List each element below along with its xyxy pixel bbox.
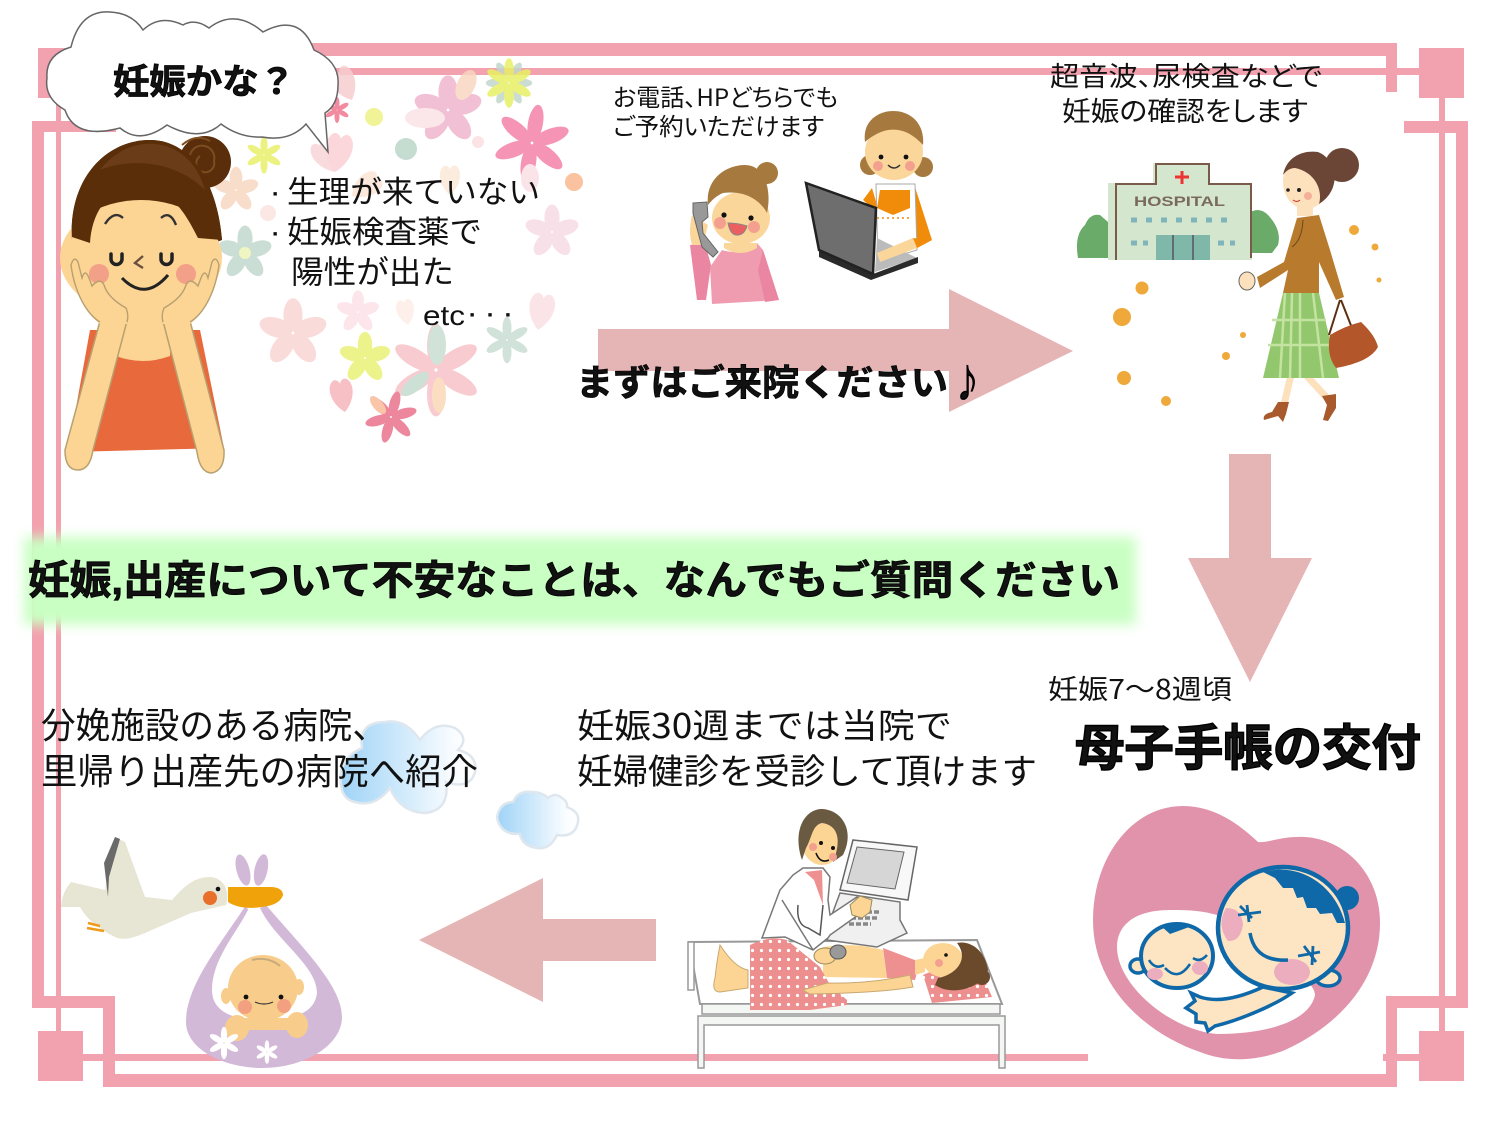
text: ultrasound note [1050, 55, 1322, 129]
illustration: walking woman [1239, 148, 1378, 422]
symptoms list: 妊娠検査薬で [287, 215, 482, 250]
symptoms list: ■ [273, 231, 277, 238]
symptoms list [273, 175, 540, 331]
text: referral to delivery hospital: 里帰り出産先の病院へ紹介 [41, 751, 478, 792]
symptoms list: ■■■ [470, 312, 510, 319]
text: reservation note: お電話、HPどちらでも [613, 78, 838, 113]
illustration: woman on phone [690, 162, 779, 304]
text: reservation note: ご予約いただけます [613, 107, 824, 142]
text: handled at this clinic until week 30 [577, 699, 1037, 792]
text: handled at this clinic until week 30: 妊娠30週までは当院で [577, 699, 952, 748]
illustration: hospital: HOSPITAL [1134, 193, 1226, 209]
illustration: ultrasound exam [688, 809, 1005, 1068]
text: ultrasound note: 超音波、尿検査などで [1050, 55, 1322, 94]
icon: mother and child heart logo [1088, 800, 1383, 1064]
text: ultrasound note: 妊娠の確認をします [1062, 90, 1308, 129]
illustration: woman at laptop [806, 111, 933, 280]
text: referral to delivery hospital: 分娩施設のある病院、 [41, 705, 387, 746]
speech bubble: 妊娠かな？: 妊娠かな？ [113, 63, 295, 102]
banner: questions welcome [24, 537, 1136, 625]
flower heart decoration [212, 52, 583, 449]
symptoms list: 生理が来ていない [287, 175, 540, 210]
symptoms list: 陽性が出た [291, 254, 454, 290]
text: まずはご来院ください: ♪ [954, 355, 981, 407]
heading: mother-child handbook: 母子手帳の交付 [1075, 722, 1421, 776]
text: referral to delivery hospital [41, 705, 478, 792]
text: handled at this clinic until week 30: 妊婦健診を受診して頂けます [577, 753, 1037, 792]
text: reservation note [613, 78, 838, 142]
text: まずはご来院ください: まずはご来院ください [576, 362, 948, 403]
clouds [341, 721, 578, 848]
symptoms list: ■ [273, 191, 277, 198]
illustration: stork carrying baby [61, 837, 342, 1068]
illustration: woman resting chin on hands [60, 136, 231, 473]
symptoms list: etc [423, 300, 465, 331]
text: weeks 7-8: 妊娠7～8週頃 [1048, 668, 1232, 707]
speech bubble: 妊娠かな？ [47, 12, 338, 152]
arrow: left [419, 878, 656, 1002]
arrow: down [1188, 454, 1312, 682]
arrow: right [598, 289, 1073, 412]
illustration: hospital [1077, 163, 1279, 260]
banner: questions welcome: 妊娠,出産について不安なことは、なんでもご質問ください [28, 559, 1120, 603]
orange dots [1113, 225, 1382, 406]
